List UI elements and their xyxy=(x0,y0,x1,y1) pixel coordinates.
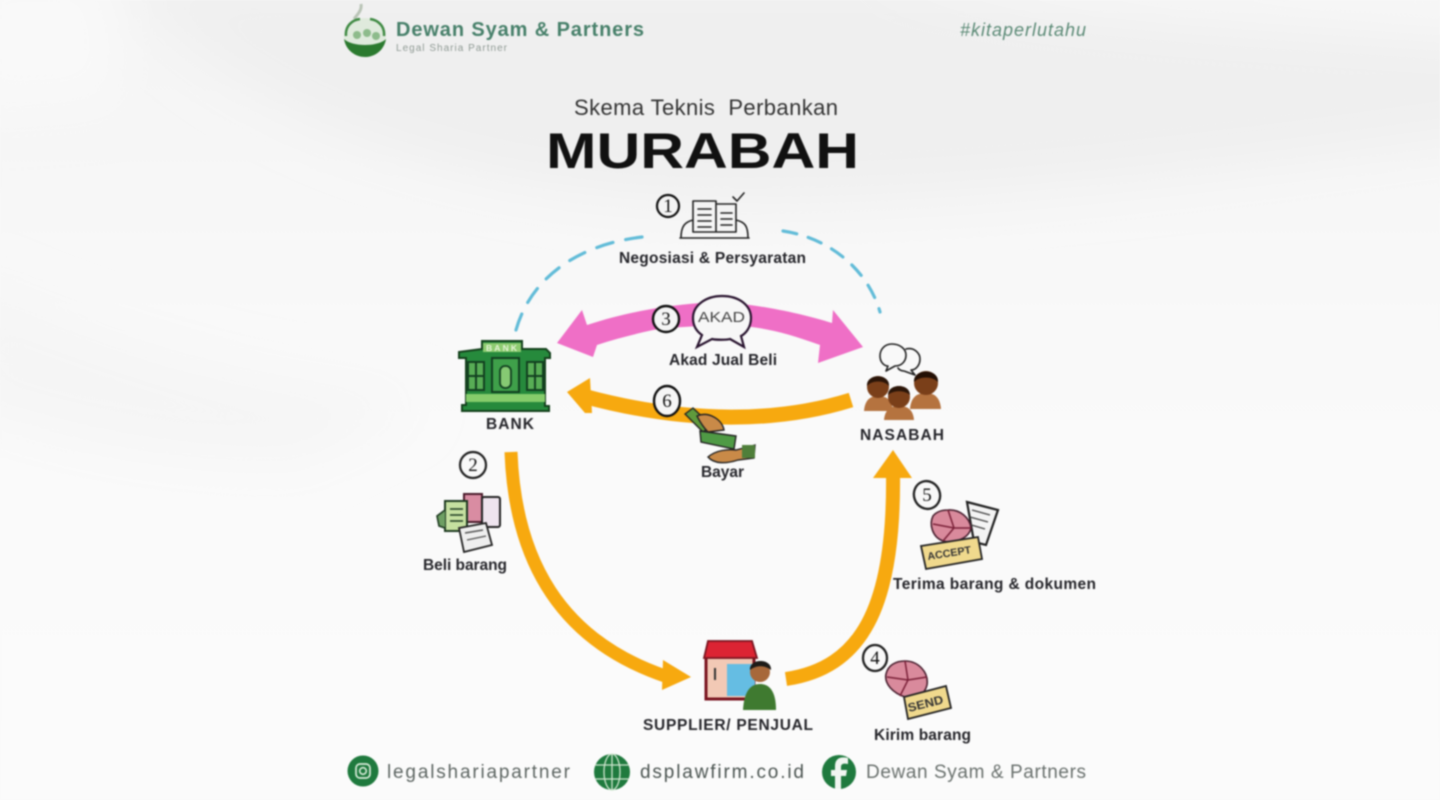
logo: Dewan Syam & Partners xyxy=(344,4,644,57)
hashtag: #kitaperlutahu xyxy=(960,20,1086,40)
number 6: 6 xyxy=(662,391,672,412)
icon: shop and seller xyxy=(704,641,776,710)
label: Beli barang xyxy=(423,557,507,574)
subtitle: Skema Teknis Perbankan xyxy=(574,95,838,120)
number 5 xyxy=(910,477,944,513)
number 4: 4 xyxy=(870,648,880,669)
arrow: orange payment xyxy=(567,378,851,417)
number 5: 5 xyxy=(922,485,932,506)
arrow: dashed negotiation arc right xyxy=(783,231,880,312)
label: SUPPLIER/ PENJUAL xyxy=(643,717,813,734)
icon: customers xyxy=(864,344,941,420)
label: BANK xyxy=(486,416,535,433)
tagline: Legal Sharia Partner xyxy=(396,43,508,54)
supplier xyxy=(643,641,813,734)
icon: purchase papers xyxy=(437,494,500,552)
handle: legalshariapartner xyxy=(387,762,571,783)
url: dsplawfirm.co.id xyxy=(640,762,804,783)
icon: hand paying money xyxy=(685,408,755,463)
label: Bayar xyxy=(701,464,744,481)
number 2: 2 xyxy=(468,455,478,476)
step 1: negotiation xyxy=(619,193,806,267)
number 1: 1 xyxy=(663,196,673,217)
icon: facebook xyxy=(822,755,856,789)
company name: Dewan Syam & Partners xyxy=(396,19,644,41)
title: MURABAH xyxy=(546,123,859,179)
step 2: beli barang xyxy=(423,452,507,574)
icon: bank building: BANK xyxy=(486,343,518,353)
bank xyxy=(459,341,550,433)
number 3: 3 xyxy=(661,309,671,330)
icon: instagram xyxy=(348,756,378,786)
arrow: pink double-headed akad xyxy=(557,303,863,363)
footer: facebook xyxy=(822,755,1086,789)
arrow: dashed negotiation arc left xyxy=(516,237,642,330)
step 3: akad xyxy=(653,296,777,369)
footer: instagram xyxy=(348,756,571,786)
icon: accepted goods: ACCEPT xyxy=(927,544,973,563)
step 5: terima barang dan dokumen xyxy=(893,477,1096,593)
label: Akad Jual Beli xyxy=(669,352,777,369)
icon: accepted goods xyxy=(921,502,998,569)
label: Kirim barang xyxy=(874,727,971,744)
label: Terima barang & dokumen xyxy=(893,576,1096,593)
footer: website xyxy=(594,754,804,790)
icon: akad speech bubble: AKAD xyxy=(698,309,745,326)
step 6: bayar xyxy=(654,386,755,481)
icon: documents xyxy=(680,193,749,238)
arrow: orange supplier to customer xyxy=(786,450,912,679)
nasabah xyxy=(860,344,944,444)
label: NASABAH xyxy=(860,427,944,444)
step 4: kirim barang xyxy=(863,645,971,744)
arrow: orange bank to supplier xyxy=(511,452,691,690)
page name: Dewan Syam & Partners xyxy=(866,762,1086,783)
icon: globe xyxy=(594,754,630,790)
icon: sent goods: SEND xyxy=(906,693,945,715)
label: Negosiasi & Persyaratan xyxy=(619,250,806,267)
logo mark xyxy=(344,4,386,57)
number 1 xyxy=(657,195,679,217)
